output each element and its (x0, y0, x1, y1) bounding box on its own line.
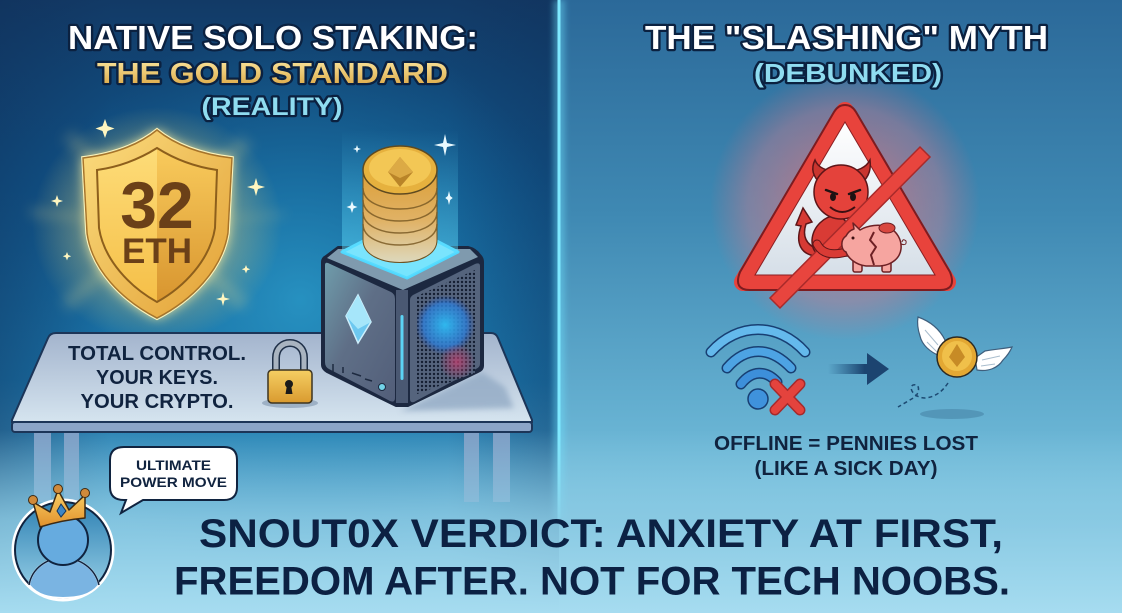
text: total control: TOTAL CONTROL. (68, 343, 246, 365)
panel: slashing myth (645, 19, 1048, 480)
panel: native solo staking (12, 19, 532, 432)
text: offline pennies lost (714, 433, 978, 480)
callout: ultimate power move (110, 447, 237, 513)
heading: slashing myth: (DEBUNKED) (754, 58, 942, 88)
icon: gold shield 32 ETH: ETH (122, 232, 192, 271)
verdict text: FREEDOM AFTER. NOT FOR TECH NOOBS. (174, 560, 1010, 604)
callout: ultimate power move: POWER MOVE (120, 474, 227, 490)
verdict text: SNOUT0X VERDICT: ANXIETY AT FIRST, (199, 512, 1003, 556)
text: total control: YOUR KEYS. (96, 367, 218, 389)
heading: slashing myth (645, 19, 1048, 88)
heading: native solo staking: THE GOLD STANDARD (97, 58, 448, 90)
callout: ultimate power move: ULTIMATE (136, 457, 211, 473)
verdict text (174, 512, 1010, 604)
heading: native solo staking (68, 19, 478, 121)
heading: native solo staking: NATIVE SOLO STAKING: (68, 19, 478, 56)
table legs (34, 432, 510, 502)
icon: padlock (262, 343, 318, 408)
icon: gold shield 32 ETH (30, 107, 285, 343)
icon: crowned user avatar (13, 484, 113, 600)
text: total control: YOUR CRYPTO. (80, 391, 234, 413)
text: offline pennies lost: OFFLINE = PENNIES LOST (714, 433, 978, 455)
icon: warning triangle with devil and broken piggy bank (710, 70, 980, 340)
icon: gold shield 32 ETH: 32 (120, 168, 194, 242)
icon: flying coin with wings (898, 317, 1012, 419)
table top (12, 333, 532, 432)
text: offline pennies lost: (LIKE A SICK DAY) (754, 458, 938, 480)
heading: slashing myth: THE "SLASHING" MYTH (645, 19, 1048, 56)
icon: home staking server with coin stack (322, 130, 514, 411)
heading: native solo staking: (REALITY) (202, 93, 342, 121)
arrow (828, 353, 889, 385)
icon: wifi offline (711, 330, 805, 410)
text: total control (68, 343, 246, 413)
